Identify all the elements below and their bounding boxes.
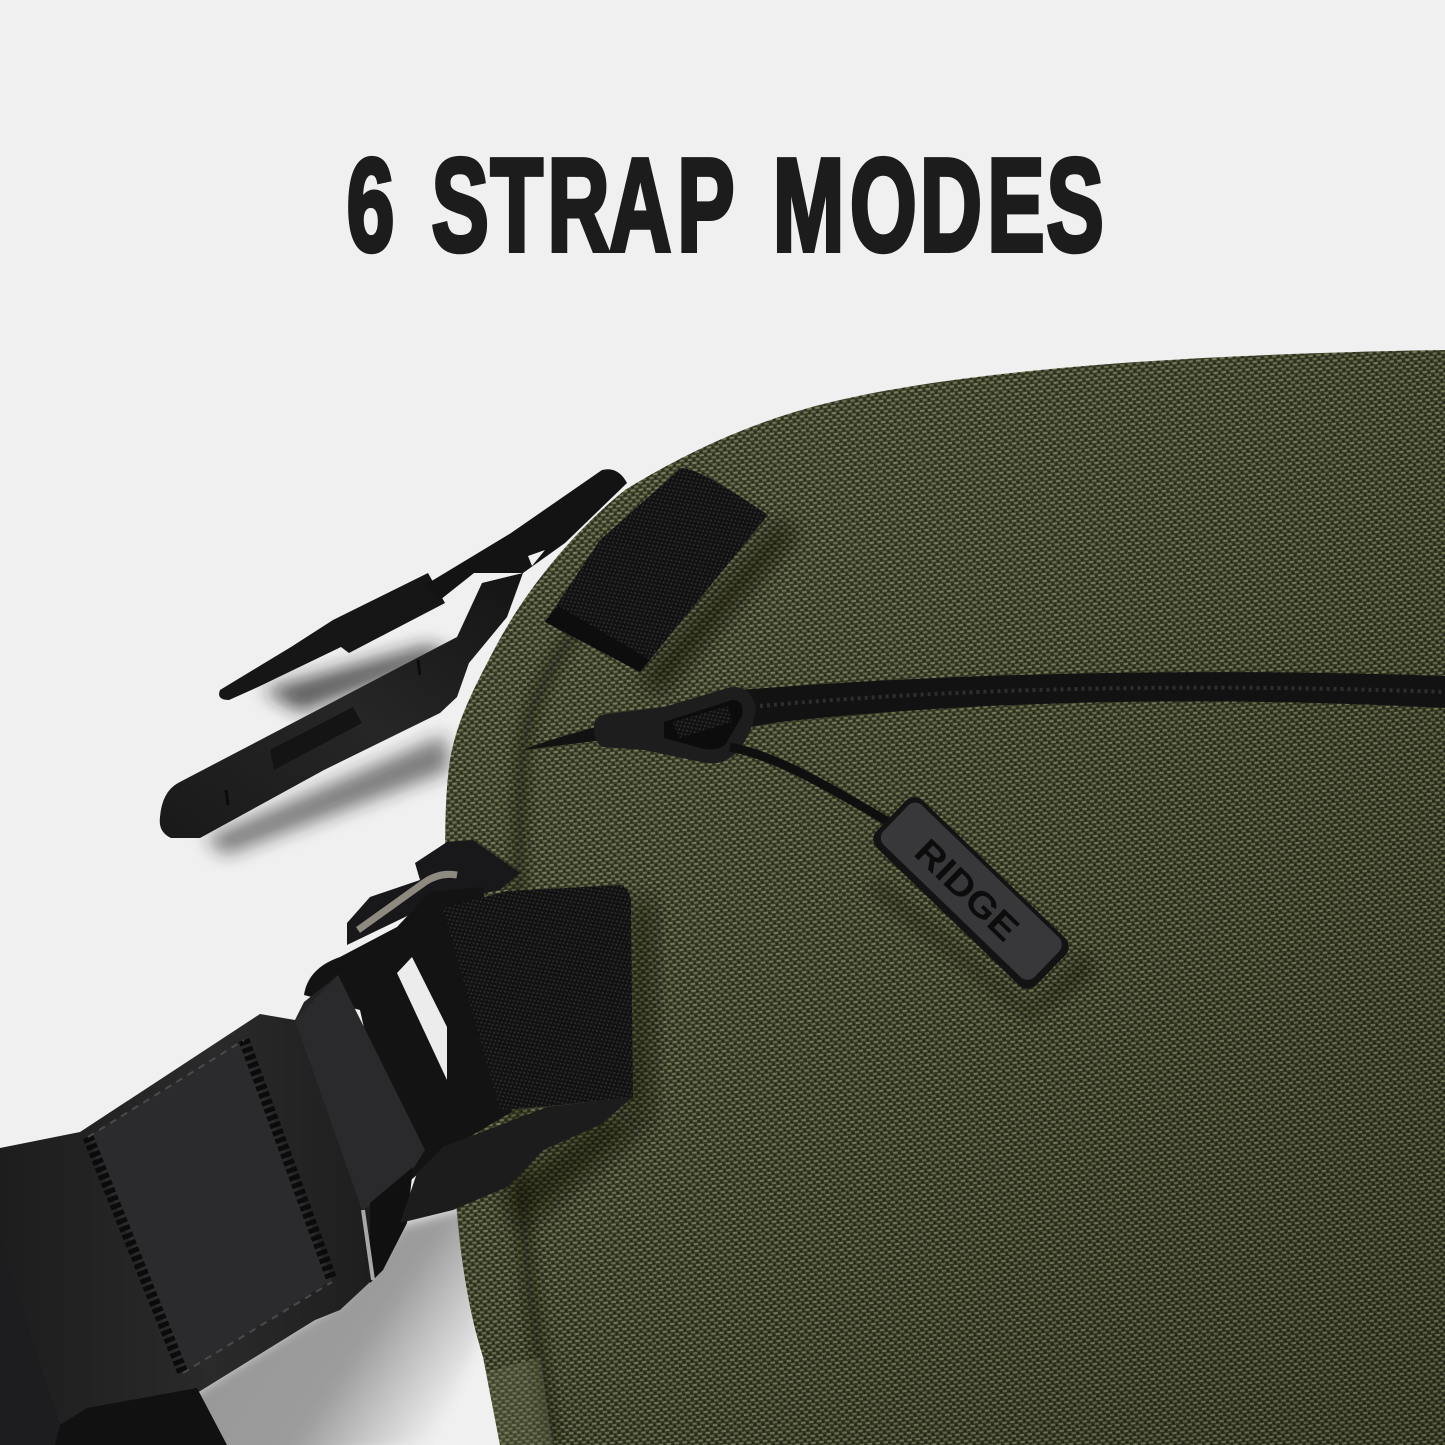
zipper track xyxy=(523,672,1445,750)
loop and zip shadows xyxy=(640,520,795,695)
zipper pull: lower xyxy=(160,573,523,838)
zipper tag: RIDGE xyxy=(868,792,1074,994)
bag body xyxy=(445,350,1445,1445)
zipper pull: upper xyxy=(219,469,627,700)
lower strap xyxy=(0,1243,227,1445)
cast shadows xyxy=(150,645,480,1445)
strap webbing loop xyxy=(443,885,633,1110)
tag logo: RIDGE xyxy=(907,831,1027,949)
zipper slider xyxy=(594,687,756,763)
rim crease xyxy=(506,631,581,1445)
leather patch xyxy=(88,1040,332,1373)
zipper cord xyxy=(730,747,895,826)
lower seam tab xyxy=(483,1357,553,1445)
buckle hardware xyxy=(304,840,520,1190)
title: 6 STRAP MODES xyxy=(347,131,1104,279)
buckle foot xyxy=(400,1097,633,1223)
leather strap xyxy=(0,975,425,1445)
webbing loop tab xyxy=(545,468,768,672)
